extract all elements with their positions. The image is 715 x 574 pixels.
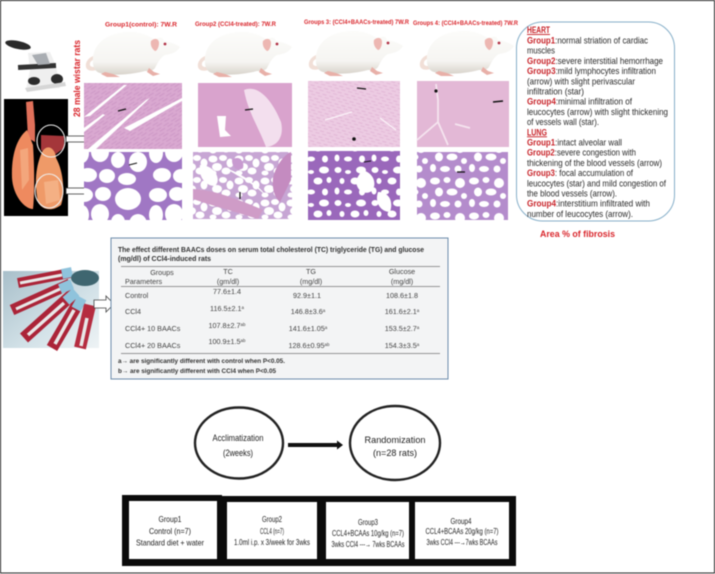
image: blood sample tubes [3,270,99,348]
table rows: a [417,342,420,347]
micrograph: lung group 1 [84,152,182,220]
rat: group 4 [420,31,514,76]
box: group 4 [415,502,509,559]
group headings: Group2 (CCl4-treated): 7W.R [195,22,277,28]
table header: TG [306,267,316,276]
arrow: lung to panels [66,185,95,197]
table rows: 108.6±1.8 [386,291,418,300]
table rows: 77.6±1.4 [213,287,241,296]
rat: group 2 [198,32,292,77]
micrograph: heart group 2 [198,83,292,147]
heading: lung: LUNG [527,126,547,137]
heading: heart: HEART [527,24,550,35]
box: group 1: Group1 [158,514,182,524]
table rows: a [417,308,420,313]
box: group 3: Group3 [358,517,378,527]
callout: histology findings: thickening of the blood vessels (arrow) [527,157,662,168]
callout: histology findings: leucocytes (star) and mild congestion of [527,177,666,188]
box: group 1 [129,501,217,559]
table rows: Control [125,291,149,300]
box: group 2 [227,502,317,559]
side label: 28 male wistar rats [72,40,83,117]
table rows: 128.6±0.95 [289,341,324,350]
lung and heart photo [4,99,68,216]
callout: histology findings: Group1:normal striation of cardiac [527,34,648,46]
micrograph: heart group 4 [417,81,509,147]
table header: Groups [150,268,174,277]
arrow: heart to panels [66,133,95,145]
table rows: CCl4+ 10 BAACs [125,324,181,333]
callout: histology findings: Group2:severe interstitial hemorrhage [527,55,663,66]
box: group 4: CCL4+BCAAs 20g/kg (n=7) [426,526,499,536]
box: group 3 [326,502,409,559]
table rows: 153.5±2.7 [385,324,417,333]
table rows: 100.9±1.5 [209,337,240,346]
icon: microscope [4,38,66,92]
table header [125,267,415,286]
table header: (gm/dl) [217,277,239,286]
callout: histology findings: the blood vessels (arrow). [527,188,617,198]
table header: (mg/dl) [300,277,322,286]
table rows: a [323,308,326,313]
box: group 3: CCL4+BCAAs 10g/kg (n=7) [332,528,404,538]
micrograph: heart group 3 [308,81,400,147]
table rows: a [325,325,328,330]
table header: Glucose [389,267,415,276]
table rows: ab [240,322,246,327]
box: group 4: Group4 [450,516,472,526]
callout: histology findings: muscles [527,45,555,56]
callout: histology findings: Group2:severe congestion with [527,147,636,158]
callout: histology findings: leucocytes (arrow) with slight thickening [527,106,668,117]
group headings: Groups 3: (CCl4+BAACs-treated) 7W.R [304,20,410,26]
table header: TC [223,267,233,276]
micrograph: lung group 2 [193,152,292,219]
micrograph: lung group 4 [417,152,508,220]
rat: group 3 [309,31,403,76]
panel: biochemistry table [111,238,448,379]
arrow: acclimatization to randomization [288,440,343,450]
table rows: 154.3±3.5 [385,341,417,350]
table rows: ab [240,338,246,343]
flow: acclimatization: (2weeks) [223,448,253,459]
table header: (mg/dl) [391,277,413,286]
callout: histology findings: infiltration (star) [527,86,584,96]
group headings [105,20,519,28]
arrow: blood sample to table [94,296,114,312]
table title: (mg/dl) of CCl4-induced rats [118,254,211,263]
box: group 2: CCL4 (n=7) [260,526,284,536]
flow: randomization: Randomization [364,435,426,445]
table rows: 161.6±2.1 [385,307,417,316]
box: group 4: 3wks CCl4 ---→7wks BCAAs [426,537,498,547]
callout: histology findings: Group1:intact alveolar wall [527,136,622,148]
table footnotes: b→ are significantly different with CCl4 when P<0.05 [118,368,276,375]
callout: histology findings: Group3: focal accumulation of [527,167,633,178]
flow: acclimatization: Acclimatization [212,433,264,444]
callout: histology findings: Group4:minimal infiltration of [527,96,632,107]
group headings: Groups 4: (CCl4+BAACs-treated) 7W.R [413,21,519,27]
table title: The effect different BAACs doses on serum total cholesterol (TC) triglyceride (TG) and glucose [118,245,424,254]
table rows: CCl4+ 20 BAACs [125,341,181,350]
callout: histology findings: of vessels wall (star). [527,116,599,127]
micrograph: lung group 3 [308,151,400,220]
table rows: 141.6±1.05 [289,324,325,333]
table rows [125,287,420,350]
flow: randomization: (n=28 rats) [373,448,417,458]
callout: histology findings: (arrow) with slight perivascular [527,75,635,86]
flow: randomization [350,406,440,480]
group headings: Group1(control): 7W.R [105,22,178,28]
flow: acclimatization [195,408,283,478]
callout: histology findings [516,22,674,221]
rat: group 1 [86,32,180,77]
table rows: a [241,305,244,310]
callout: histology findings: Group4:interstitium infiltrated with [527,198,650,209]
micrograph: heart group 1 [84,83,182,149]
table footnotes: a→ are significantly different with control when P<0.05. [118,358,285,365]
table rows: a [417,325,420,330]
box: group 2: 1.0ml i.p. x 3/week for 3wks [234,537,310,547]
table footnotes [118,358,285,375]
table rows: 146.8±3.6 [291,307,323,316]
table rows: ab [324,342,330,347]
callout: histology findings: Group3:mild lymphocytes infiltration [527,65,656,76]
box: group 3: 3wks CCl4 ---→ 7wks BCAAs [332,539,404,549]
treatment groups panel [122,495,516,566]
table rows: CCl4 [125,307,141,316]
table rows: 107.8±2.7 [209,321,240,330]
caption: area of fibrosis: Area % of fibrosis [540,229,615,239]
table rows: 116.5±2.1 [210,304,241,313]
table title [118,245,424,263]
table header: Parameters [125,277,163,286]
box: group 1: Control (n=7) [149,526,191,536]
box: group 1: Standard diet + water [136,538,204,548]
table rows: 92.9±1.1 [293,291,321,300]
callout: histology findings: number of leucocytes (arrow). [527,208,633,219]
box: group 2: Group2 [262,514,282,524]
